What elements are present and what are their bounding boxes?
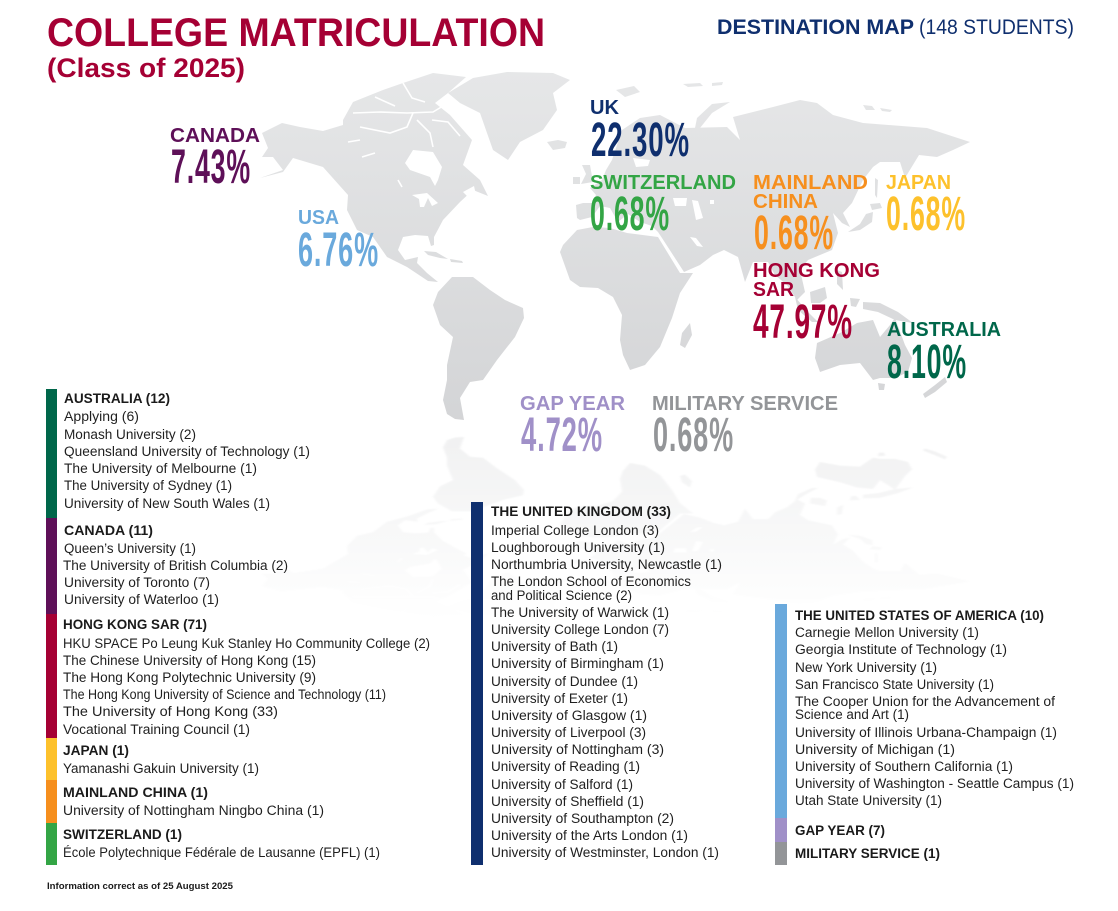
list: Australia: The University of Sydney (1) [64, 478, 232, 493]
list: United Kingdom: University of Nottingham (3) [491, 742, 664, 757]
list: United Kingdom: and Political Science (2) [491, 588, 632, 603]
list: Hong Kong SAR: HONG KONG SAR (71) [63, 617, 207, 632]
list: Hong Kong SAR: The University of Hong Kong (33) [63, 704, 278, 719]
Great Britain and Ireland [581, 165, 593, 184]
Iceland [547, 140, 567, 150]
list: Australia: Monash University (2) [64, 427, 196, 442]
stat: Australia [887, 319, 1001, 389]
title [47, 11, 545, 83]
list: United Kingdom: Northumbria University, Newcastle (1) [491, 557, 722, 572]
Arctic straits [353, 103, 448, 113]
stat: USA: USA [298, 207, 339, 229]
Franz Josef Land [683, 83, 703, 87]
Sulawesi [850, 298, 860, 307]
list: United States of America: San Francisco State University (1) [795, 677, 994, 692]
Cuba and Caribbean [424, 251, 448, 259]
South America [433, 277, 524, 420]
list: Japan [46, 738, 259, 780]
list: United Kingdom: University of Exeter (1) [491, 691, 628, 706]
list: Gap Year [775, 818, 885, 842]
list: Australia: Queensland University of Technology (1) [64, 444, 310, 459]
Greenland [448, 72, 570, 160]
stat: USA: 6.76% [298, 224, 379, 277]
North America [260, 73, 488, 282]
list: Hong Kong SAR: The Hong Kong University of Science and Technology (11) [63, 687, 386, 702]
stat: Mainland China: CHINA [753, 191, 818, 213]
Sumatra and Java [795, 297, 818, 322]
list: Australia: AUSTRALIA (12) [64, 391, 170, 406]
list: Switzerland: École Polytechnique Fédérale de Lausanne (EPFL) (1) [63, 845, 380, 860]
list: Canada: University of Toronto (7) [64, 575, 210, 590]
Caspian Sea [692, 200, 703, 220]
list: Australia: University of New South Wales (1) [64, 496, 270, 511]
Novaya Zemlya [695, 102, 730, 128]
list: United States of America [775, 604, 1074, 818]
list: Canada: Queen’s University (1) [64, 541, 196, 556]
list: United Kingdom: University of Dundee (1) [491, 674, 638, 689]
New Siberian Islands [863, 105, 875, 110]
Baltic Sea [633, 158, 650, 167]
list: United Kingdom [471, 502, 722, 865]
Great Lakes [412, 193, 438, 207]
Japan [848, 212, 873, 232]
list: United Kingdom: The University of Warwick (1) [491, 605, 669, 620]
list: United Kingdom: University of Bath (1) [491, 639, 618, 654]
list: Switzerland: SWITZERLAND (1) [63, 827, 182, 842]
list: United States of America: Utah State University (1) [795, 793, 942, 808]
list: United Kingdom: Loughborough University (1) [491, 540, 665, 555]
stat: Japan: JAPAN [886, 172, 951, 194]
list: United States of America: The Cooper Union for the Advancement of [795, 694, 1055, 709]
title: (Class of 2025) [47, 53, 245, 83]
stat: Gap Year: GAP YEAR [520, 393, 626, 415]
stat: Hong Kong SAR: HONG KONG [753, 260, 880, 282]
stat: Military Service: MILITARY SERVICE [652, 393, 838, 415]
list: United Kingdom: University of the Arts London (1) [491, 828, 688, 843]
stat: Hong Kong SAR [753, 260, 880, 349]
Eurasia [576, 100, 970, 300]
list: United Kingdom: University of Salford (1) [491, 777, 633, 792]
list: Hong Kong SAR [46, 614, 430, 738]
list: Australia [46, 389, 310, 518]
stat: Hong Kong SAR: SAR [753, 279, 795, 301]
Persian Gulf [690, 237, 703, 247]
list: Australia: The University of Melbourne (1) [64, 461, 257, 476]
stat: Canada [170, 125, 260, 194]
list: United States of America: University of Washington - Seattle Campus (1) [795, 776, 1074, 791]
list: Canada: CANADA (11) [64, 523, 153, 538]
Madagascar [680, 323, 692, 348]
list: Switzerland [46, 823, 380, 865]
list: Gap Year: GAP YEAR (7) [795, 823, 885, 838]
list: United Kingdom: The London School of Economics [491, 574, 691, 589]
Australia [815, 318, 912, 380]
list: Canada: University of Waterloo (1) [64, 592, 219, 607]
list: United States of America: Georgia Institute of Technology (1) [795, 642, 1007, 657]
stat: Gap Year [520, 393, 626, 462]
list: Mainland China: University of Nottingham Ningbo China (1) [63, 803, 324, 818]
stat: Military Service [652, 393, 838, 462]
list: United States of America: University of Michigan (1) [795, 742, 955, 757]
list: United States of America: University of Illinois Urbana-Champaign (1) [795, 725, 1057, 740]
list: United Kingdom: University of Liverpool (3) [491, 725, 646, 740]
list: United States of America: Carnegie Mellon University (1) [795, 625, 979, 640]
list: Military Service: MILITARY SERVICE (1) [795, 846, 940, 861]
list: Canada: The University of British Columbia (2) [63, 558, 288, 573]
footnote: Information correct as of 25 August 2025 [47, 881, 233, 891]
New Zealand [923, 377, 947, 398]
list: United States of America: Science and Art (1) [795, 707, 909, 722]
stat: Switzerland: 0.68% [590, 188, 670, 241]
list: United Kingdom: University of Glasgow (1) [491, 708, 647, 723]
list: United Kingdom: University of Birmingham (1) [491, 656, 664, 671]
Sakhalin [875, 178, 878, 198]
stat: Mainland China: MAINLAND [753, 172, 868, 194]
list: Australia: Applying (6) [64, 409, 139, 424]
Aral Sea [710, 200, 714, 204]
Svalbard [616, 86, 640, 97]
list: Mainland China: MAINLAND CHINA (1) [63, 785, 208, 800]
stat: UK [590, 97, 690, 167]
stat: Australia: AUSTRALIA [887, 319, 1001, 341]
list: Hong Kong SAR: Vocational Training Council (1) [63, 722, 250, 737]
stat: Hong Kong SAR: 47.97% [753, 296, 853, 349]
Gulf of St Lawrence [463, 186, 476, 197]
heading: destination map [717, 16, 1074, 39]
Africa [560, 227, 693, 370]
list: Japan: Yamanashi Gakuin University (1) [63, 761, 259, 776]
list: Military Service [775, 842, 940, 865]
stat: Australia: 8.10% [887, 336, 967, 389]
list: United Kingdom: University of Reading (1) [491, 759, 640, 774]
Canadian lakes [348, 140, 360, 142]
list: United Kingdom: THE UNITED KINGDOM (33) [491, 504, 671, 519]
list: Hong Kong SAR: The Hong Kong Polytechnic University (9) [63, 670, 316, 685]
Tasmania [878, 383, 885, 390]
list: United Kingdom: University of Westminster, London (1) [491, 845, 719, 860]
list: United Kingdom: Imperial College London (3) [491, 523, 659, 538]
list: Hong Kong SAR: HKU SPACE Po Leung Kuk Stanley Ho Community College (2) [63, 636, 430, 651]
list: United Kingdom: University College London (7) [491, 622, 669, 637]
stat: Military Service: 0.68% [653, 409, 734, 462]
stat: Japan [886, 172, 966, 241]
heading: destination map: DESTINATION MAP [717, 16, 914, 39]
Hudson Bay [405, 150, 442, 186]
world map background [260, 72, 970, 420]
stat: Mainland China: 0.68% [754, 207, 834, 260]
stat: Canada: CANADA [170, 125, 260, 147]
list: Canada [46, 518, 288, 614]
Black Sea [673, 198, 687, 206]
stat: Switzerland: SWITZERLAND [590, 172, 736, 194]
list: United Kingdom: University of Sheffield (1) [491, 794, 644, 809]
list: United Kingdom: University of Southampton (2) [491, 811, 674, 826]
New Guinea [863, 302, 913, 323]
title: COLLEGE MATRICULATION [47, 11, 545, 55]
stat: Mainland China [753, 172, 868, 260]
list: United States of America: University of Southern California (1) [795, 759, 1013, 774]
Philippines [837, 270, 843, 290]
list: United States of America: THE UNITED STATES OF AMERICA (10) [795, 608, 1044, 623]
stat: UK: 22.30% [591, 114, 690, 167]
stat: USA [298, 207, 379, 277]
stat: Gap Year: 4.72% [521, 409, 603, 462]
heading: destination map: (148 STUDENTS) [919, 16, 1074, 39]
list: Mainland China [46, 780, 324, 823]
stat: UK: UK [590, 97, 620, 119]
stat: Japan: 0.68% [886, 188, 966, 241]
Borneo [810, 287, 827, 303]
list: Japan: JAPAN (1) [63, 743, 129, 758]
list: Hong Kong SAR: The Chinese University of Hong Kong (15) [63, 653, 316, 668]
list: United States of America: New York University (1) [795, 660, 937, 675]
stat: Canada: 7.43% [171, 141, 251, 194]
map reflection [0, 432, 1118, 622]
